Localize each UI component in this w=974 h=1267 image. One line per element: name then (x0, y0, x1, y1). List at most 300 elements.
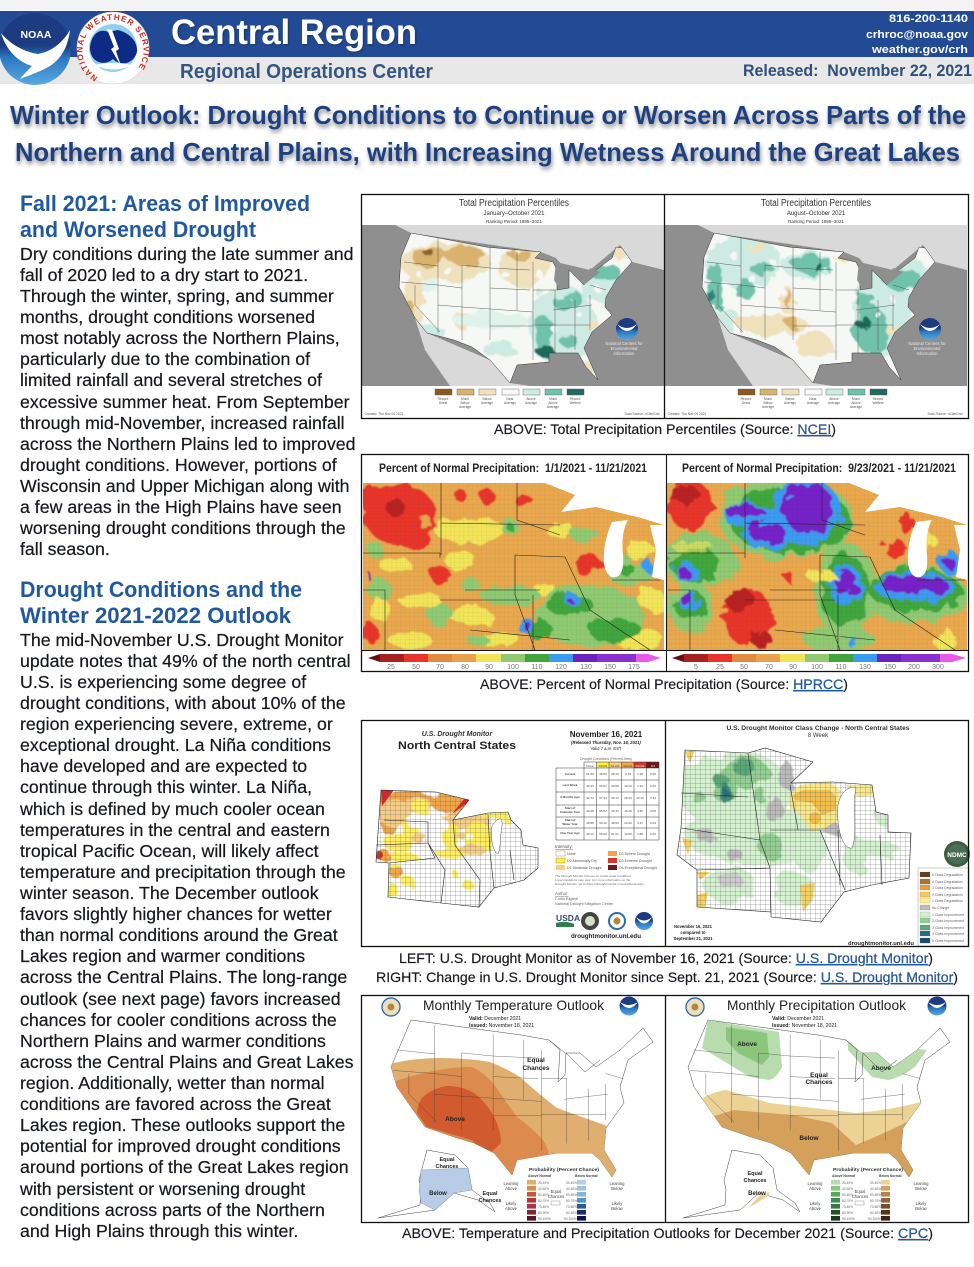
body text: Drought Conditions: and High Plains through this winter. (20, 1221, 298, 1241)
legend labels: Average (481, 401, 493, 405)
text: contact details: weather.gov/crh (871, 44, 968, 56)
legend: precipitation probability: Likely (810, 1201, 821, 1206)
legend: right color bar: 150 (884, 664, 896, 671)
table: drought conditions: 34.48 (586, 809, 594, 813)
body text: Fall 2021: Through the winter, spring, and summer (20, 286, 334, 306)
legend: temperature probability: Leaning (610, 1181, 625, 1186)
legend: precipitation probability: Leaning (808, 1181, 823, 1186)
caption: precipitation percentiles: ABOVE: Total Precipitation Percentiles (Source: NCEI) (494, 421, 836, 437)
label: map labels: Above (445, 1116, 465, 1123)
text: map date: Valid 7 a.m. EST (590, 746, 622, 751)
body text: Drought Conditions: outlook (see next page) favors increased (20, 989, 341, 1009)
table: drought conditions: 24.93 (624, 821, 632, 825)
table: drought conditions: 38.69 (611, 821, 619, 825)
legend: precipitation probability: Leaning (914, 1181, 929, 1186)
text: NCEI credit: Information (917, 351, 938, 356)
legend: left color bar: 120 (555, 664, 567, 671)
legend: temperature probability: 50-60% (566, 1193, 577, 1197)
legend: class change: 1 Class Improvement (932, 913, 964, 917)
text column: Drought Conditions (19, 577, 354, 1241)
icon: NOAA logo: NOAA (21, 29, 52, 41)
legend: precipitation probability (808, 1167, 929, 1221)
map: percent of normal, since September (664, 478, 967, 653)
icons: agency seals (686, 996, 946, 1016)
heading: Fall 2021: and Worsened Drought (20, 217, 257, 242)
text: map titles (379, 463, 957, 475)
text: NCEI credit (908, 341, 946, 356)
table: drought conditions: Last Week (563, 783, 578, 787)
label: map labels: Chances (744, 1178, 766, 1184)
table: drought conditions: D2-D4 (624, 764, 633, 768)
legend labels: Record (873, 397, 883, 401)
table: drought conditions: 1.38 (637, 772, 643, 776)
caption: drought monitor (376, 950, 958, 985)
label: map labels: Chances (436, 1164, 458, 1170)
heading: Drought Conditions and the Winter Outlook: Drought Conditions and the (20, 577, 302, 602)
text: map titles: Percent of Normal Precipitation: 9/23/2021 - 11/21/2021 (682, 463, 957, 475)
legend: precipitation probability: Chances (852, 1194, 868, 1199)
table: drought conditions (556, 762, 659, 840)
text: map title: Total Precipitation Percentiles (761, 198, 871, 209)
icon: NDMC logo (944, 841, 970, 867)
legend: right color bar: 110 (835, 664, 847, 671)
legend: right color bar: 5 (694, 664, 698, 671)
label: map labels: Equal (483, 1191, 498, 1197)
heading: Drought Conditions and the Winter Outlook: Winter 2021-2022 Outlook (20, 603, 292, 628)
legend: temperature probability: Likely (612, 1201, 623, 1206)
body text: Drought Conditions: conditions are favored across the Great (20, 1094, 331, 1114)
text: contact details: 816-200-1140 (889, 13, 968, 25)
text: notes and author: Drought Monitor, go to https://droughtmonitor.unl.edu/About.aspx (555, 882, 644, 886)
panel: percent of normal precipitation (358, 454, 968, 672)
body text: Fall 2021: Dry conditions during the late summer and (20, 244, 353, 264)
caption: percent of normal: ABOVE: Percent of Normal Precipitation (Source: HPRCC) (480, 676, 848, 692)
text: droughtmonitor url: droughtmonitor.unl.edu (848, 941, 915, 947)
legend labels: Much (764, 397, 772, 401)
table: drought conditions: D4 (651, 764, 655, 768)
text: map title: January–October 2021 (483, 211, 545, 217)
legend: right color bar: 100 (811, 664, 823, 671)
legend: right color bar: 90 (789, 664, 797, 671)
legend labels: Wettest (569, 401, 581, 405)
table: drought conditions: 65.52 (599, 809, 607, 813)
table: drought conditions: 39.88 (586, 821, 594, 825)
legend: precipitation probability: Below Normal (879, 1174, 902, 1178)
body text: Drought Conditions: drought conditions, with about 10% of the (20, 693, 346, 713)
text: dates: Issued: November 18, 2021 (469, 1023, 534, 1029)
text: class change title (726, 725, 910, 739)
text: map title (459, 198, 569, 224)
body text: Drought Conditions: temperatures in the central and eastern (20, 820, 330, 840)
table: drought conditions: 49.33 (586, 784, 594, 788)
table: drought conditions: D1-D4 (611, 764, 620, 768)
table: drought conditions: Start of (565, 806, 575, 810)
label: map labels: Above (737, 1041, 757, 1048)
text: title: Monthly Precipitation Outlook (727, 997, 907, 1013)
caption: outlooks: ABOVE: Temperature and Precipitation Outlooks for December 2021 (Source: CPC) (402, 1225, 933, 1241)
body text: Fall 2021: excessive summer heat. From September (20, 392, 350, 412)
legend: percentile colors (435, 389, 584, 395)
text: notes and author (555, 874, 644, 906)
table: drought conditions: None (586, 764, 594, 768)
table: drought conditions: Current (565, 772, 575, 776)
legend: temperature probability: 33-40% (538, 1181, 549, 1185)
body text: Drought Conditions: exceptional drought. La Niña conditions (20, 735, 331, 755)
text: notes and author: The Drought Monitor focuses on broad-scale conditions. (555, 874, 632, 878)
table: drought conditions: 0.00 (650, 832, 656, 836)
legend: precipitation probability: 80-90% (842, 1211, 853, 1215)
table: drought conditions: 0.00 (650, 809, 656, 813)
body text: Fall 2021: through mid-November, increased rainfall (20, 413, 345, 433)
legend: intensity: Intensity: (555, 844, 573, 849)
body text: Fall 2021: limited rainfall and several stretches of (20, 370, 322, 390)
panel: drought monitor (362, 720, 970, 947)
legend: intensity: D0 Abnormally Dry (567, 859, 597, 863)
table: drought conditions: 10.89 (624, 832, 632, 836)
table: drought conditions: 45.14 (611, 796, 619, 800)
text: map titles: Percent of Normal Precipitation: 1/1/2021 - 11/21/2021 (379, 463, 648, 475)
legend: precipitation probability: 70-80% (870, 1205, 881, 1209)
heading: Fall 2021 (20, 191, 310, 242)
label: map labels: Equal (810, 1072, 828, 1079)
text: dates: Valid: December 2021 (772, 1016, 824, 1022)
table: drought conditions: 0.00 (650, 784, 656, 788)
text: map title: Total Precipitation Percentiles (459, 198, 569, 209)
map: August-October percentiles (665, 198, 967, 416)
legend labels (365, 397, 660, 416)
legend labels: Below (764, 401, 773, 405)
map: Alaska (378, 1150, 495, 1218)
legend labels: Record (570, 397, 580, 401)
title (10, 100, 966, 167)
text: notes and author: Author: (555, 891, 569, 896)
table: drought conditions: 2.34 (650, 796, 656, 800)
body text: Drought Conditions: across the Central Plains and Great Lakes (20, 1052, 354, 1072)
table: drought conditions: One Year Ago (560, 831, 580, 835)
map: percent of normal, year to date (358, 483, 666, 650)
table: drought conditions: 48.92 (599, 772, 607, 776)
icon: National Weather Service logo: NATIONAL WEATHER SERVICE (76, 14, 150, 82)
legend: precipitation probability: 70-80% (842, 1205, 853, 1209)
icons: partner logos (556, 912, 653, 930)
legend labels: Average (504, 401, 516, 405)
table: drought conditions: 10.24 (624, 784, 632, 788)
legend: temperature probability: 90-100% (564, 1217, 577, 1221)
legend: right color bar: 25 (716, 664, 724, 671)
legend labels: Below (461, 401, 470, 405)
legend labels: Much (549, 397, 557, 401)
label: map labels: Equal (748, 1171, 763, 1177)
body text: Fall 2021: drought conditions. However, portions of (20, 455, 337, 475)
legend: class change: 3 Class Degradation (932, 886, 963, 890)
table: drought conditions: D0-D4 (599, 764, 608, 768)
text: comparison dates: compared to (680, 930, 706, 935)
text: map title (761, 198, 871, 224)
header banner (0, 11, 974, 85)
text: comparison dates: September 21, 2021 (673, 936, 713, 941)
legend: class change: 4 Class Improvement (932, 932, 964, 936)
legend labels: Driest (742, 401, 750, 405)
body text: Fall 2021: fall season. (20, 539, 110, 559)
legend: temperature probability: 33-40% (566, 1181, 577, 1185)
legend: temperature probability: Above (505, 1186, 518, 1191)
panel: monthly outlooks (362, 995, 968, 1222)
body text: Drought Conditions: conditions across parts of the Northern (20, 1200, 325, 1220)
legend: precipitation probability: 90-100% (868, 1217, 881, 1221)
legend labels: Record (438, 397, 448, 401)
legend: temperature probability: Above (505, 1206, 518, 1211)
map: U.S. Drought Monitor north central states (376, 790, 538, 908)
text: map title: Ranking Period: 1895–2021 (486, 219, 542, 224)
body text: Drought Conditions: which is defined by much cooler ocean (19, 799, 325, 819)
legend: precipitation probability: Above (809, 1206, 822, 1211)
legend: right color bar (672, 654, 966, 671)
legend: left color bar: 130 (580, 664, 592, 671)
map: monthly temperature outlook (378, 996, 653, 1221)
text: map title: U.S. Drought Monitor (422, 731, 493, 738)
legend: temperature probability: 40-50% (566, 1187, 577, 1191)
table: drought conditions: 29.68 (611, 784, 619, 788)
text: NCEI credit: National Centers for (605, 341, 643, 346)
legend: temperature probability (504, 1167, 625, 1221)
legend: precipitation probability: 33-40% (842, 1181, 853, 1185)
caption: drought monitor: RIGHT: Change in U.S. Drought Monitor since Sept. 21, 2021 (Source: U.S. Drought Monitor) (376, 969, 958, 985)
body text: Fall 2021: most notably across the Northern Plains, (20, 328, 340, 348)
icon: NOAA logo (0, 13, 71, 85)
text: map title (398, 731, 516, 752)
legend: left color bar: 50 (412, 664, 420, 671)
legend: class change: 5 Class Degradation (932, 873, 963, 877)
body text: Drought Conditions: with persistent or worsening drought (19, 1179, 305, 1199)
legend: temperature probability: Chances (548, 1194, 564, 1199)
legend: class change: 3 Class Improvement (932, 926, 964, 930)
body text: Drought Conditions: Northern Plains and warmer conditions (20, 1031, 326, 1051)
text: notes and author: National Drought Mitigation Center (555, 902, 614, 906)
table: drought conditions: 3 Months Ago (560, 795, 580, 799)
text: notes and author: Curtis Riganti (555, 897, 578, 901)
legend: class change: 2 Class Improvement (932, 919, 964, 923)
legend: temperature probability: 50-60% (538, 1193, 549, 1197)
body text: Drought Conditions: temperature and precipitation through the (20, 862, 346, 882)
heading: Central Region: Central Region (171, 13, 417, 52)
legend labels: Average (459, 405, 471, 409)
legend labels: Near (809, 397, 817, 401)
legend: right color bar: 130 (859, 664, 871, 671)
table: drought conditions: 1.19 (637, 784, 643, 788)
table: drought conditions: 21.01 (611, 832, 619, 836)
body text: Drought Conditions: region. Additionally, wetter than normal (20, 1073, 325, 1093)
legend: temperature probability: Likely (506, 1201, 517, 1206)
text: class change title: U.S. Drought Monitor Class Change - North Central States (726, 725, 910, 732)
legend: class change: 1 Class Degradation (932, 899, 963, 903)
body text: Drought Conditions: The mid-November U.S. Drought Monitor (20, 630, 344, 650)
legend: left color bar: 100 (507, 664, 519, 671)
legend labels: Average (807, 401, 819, 405)
legend: right color bar: 200 (908, 664, 920, 671)
legend: intensity: D2 Severe Drought (619, 852, 650, 856)
legend: right color bar: 50 (740, 664, 748, 671)
legend: intensity: D4 Exceptional Drought (619, 866, 657, 870)
legend: precipitation probability: 90-100% (842, 1217, 855, 1221)
legend labels: Above (829, 397, 839, 401)
table: drought conditions: 60.12 (599, 821, 607, 825)
legend: precipitation probability: 40-50% (870, 1187, 881, 1191)
legend: right color bar: 300 (932, 664, 944, 671)
text: contact details: crhroc@noaa.gov (866, 29, 969, 41)
legend: precipitation probability: 60-70% (842, 1199, 853, 1203)
text: class change title: 8 Week (808, 733, 829, 739)
map: monthly precipitation outlook (683, 996, 950, 1221)
title: Winter Outlook: Drought Conditions to Continue or Worsen Across Parts of the (10, 100, 966, 130)
caption: drought monitor: LEFT: U.S. Drought Monitor as of November 16, 2021 (Source: U.S. Drought Monitor) (399, 950, 933, 966)
legend: temperature probability: Leaning (504, 1181, 519, 1186)
legend: precipitation probability: 40-50% (842, 1187, 853, 1191)
heading: Regional Operations Center: Regional Operations Center (180, 61, 433, 83)
icons: partner logos: USDA (556, 913, 580, 923)
text: map date: November 16, 2021 (570, 730, 643, 739)
body text: Fall 2021: across the Northern Plains led to improved (20, 434, 355, 454)
body text: Drought Conditions: than normal conditions around the Great (20, 925, 338, 945)
legend: temperature probability: Below (611, 1206, 624, 1211)
text: map title: August–October 2021 (787, 211, 846, 217)
legend: temperature probability: 90-100% (538, 1217, 551, 1221)
table: drought conditions: 57.33 (599, 796, 607, 800)
table: drought conditions: 42.73 (586, 796, 594, 800)
text: map date: Drought Conditions (Percent Area) (580, 757, 632, 761)
label: map labels: Below (799, 1135, 820, 1142)
text: comparison dates: November 16, 2021 (674, 924, 713, 929)
table: drought conditions: 50.90 (599, 832, 607, 836)
table: drought conditions: 0.04 (650, 821, 656, 825)
legend labels: Above (526, 397, 536, 401)
body text: Fall 2021 (19, 244, 355, 559)
body text: Fall 2021: months, drought conditions worsened (20, 307, 315, 327)
legend: left color bar: 90 (485, 664, 493, 671)
legend: intensity: D1 Moderate Drought (567, 866, 602, 870)
legend: class change (918, 868, 969, 946)
label: map labels (429, 1057, 550, 1204)
text: NCEI credit: Information (614, 351, 635, 356)
body text: Drought Conditions: update notes that 49% of the north central (20, 651, 351, 671)
table: drought conditions: 28.10 (611, 772, 619, 776)
legend: precipitation probability: Probability (Percent Chance) (833, 1167, 903, 1173)
label: map labels: Chances (805, 1079, 833, 1086)
legend: intensity (555, 844, 657, 870)
legend: temperature probability: 70-80% (538, 1205, 549, 1209)
text: contact details (866, 13, 969, 56)
text: dates (469, 1016, 534, 1029)
text: NCEI credit (605, 341, 643, 356)
legend labels: Average (547, 405, 559, 409)
body text: Drought Conditions: chances for cooler conditions across the (20, 1010, 337, 1030)
label: map labels: Chances (479, 1198, 501, 1204)
label: map labels (737, 1041, 891, 1197)
text: notes and author: Local conditions may vary. For more information on the (555, 878, 631, 882)
text: NCEI credit: National Centers for (908, 341, 946, 346)
legend labels: Below (483, 397, 492, 401)
label: map labels: Below (748, 1191, 766, 1197)
legend: left color bar: 175 (628, 664, 640, 671)
legend: precipitation probability: 33-40% (870, 1181, 881, 1185)
body text: Drought Conditions: U.S. is experiencing some degree of (20, 672, 306, 692)
legend labels (668, 397, 963, 416)
body text: Drought Conditions: potential for improved drought conditions (20, 1136, 341, 1156)
text: title: Monthly Temperature Outlook (423, 997, 605, 1013)
legend: right color bar: 70 (765, 664, 773, 671)
legend: temperature probability: 80-90% (538, 1211, 549, 1215)
table: drought conditions: 10.15 (636, 796, 644, 800)
table: drought conditions: Calendar Year (560, 810, 581, 814)
legend: precipitation probability: Above Normal (832, 1174, 855, 1178)
legend labels: Average (762, 405, 774, 409)
icons: agency seals (382, 996, 638, 1016)
table: drought conditions: 51.06 (586, 772, 594, 776)
legend: precipitation probability: Likely (916, 1201, 927, 1206)
legend labels: Created: Thu Nov 04 2021 (365, 412, 404, 416)
legend: left color bar: 80 (461, 664, 469, 671)
body text: Fall 2021: particularly due to the combination of (20, 349, 310, 369)
legend: temperature probability: 60-70% (538, 1199, 549, 1203)
legend labels: Much (461, 397, 469, 401)
body text: Drought Conditions: continue through this winter. La Niña, (20, 777, 312, 797)
table: drought conditions: 20.23 (624, 796, 632, 800)
legend: precipitation probability: Below (915, 1206, 928, 1211)
body text: Drought Conditions: Lakes region and warmer conditions (20, 946, 305, 966)
text: NCEI credit: Environmental (914, 346, 940, 351)
map: drought class change (672, 745, 917, 930)
table: drought conditions: 9.79 (625, 772, 631, 776)
body text: Drought Conditions: Lakes region. These outlooks support the (20, 1115, 345, 1135)
legend labels: Much (852, 397, 860, 401)
legend labels: Driest (439, 401, 447, 405)
label: map labels: Chances (522, 1065, 550, 1072)
body text: Drought Conditions: have developed and are expected to (20, 756, 307, 776)
body text: Fall 2021: worsening drought conditions through the (19, 518, 346, 538)
text column: Fall 2021 (19, 191, 355, 559)
body text: Drought Conditions: tropical Pacific Ocean, will likely affect (20, 841, 319, 861)
legend labels: Wettest (872, 401, 884, 405)
legend labels: Above (548, 401, 558, 405)
legend labels: Average (828, 401, 840, 405)
map: Alaska (683, 1150, 800, 1218)
title: Northern and Central Plains, with Increasing Wetness Around the Great Lakes (15, 137, 960, 167)
legend: precipitation probability: Below (915, 1186, 928, 1191)
text: dates: Issued: November 18, 2021 (772, 1023, 837, 1029)
table: drought conditions: 0.00 (650, 772, 656, 776)
legend: precipitation probability: 60-70% (870, 1199, 881, 1203)
legend: left color bar (368, 654, 661, 671)
top strip (0, 0, 974, 10)
legend: left color bar: 25 (387, 664, 395, 671)
body text: Fall 2021: fall of 2020 led to a dry start to 2021. (20, 265, 308, 285)
body text: Drought Conditions: across the Central Plains. The long-range (20, 967, 347, 987)
legend: precipitation probability: 50-60% (870, 1193, 881, 1197)
legend labels: Average (525, 401, 537, 405)
legend: temperature probability: 60-70% (566, 1199, 577, 1203)
table: drought conditions: 3.27 (637, 821, 643, 825)
legend: class change: 5 Class Improvement (932, 939, 964, 943)
table: drought conditions: Start of (565, 818, 575, 822)
legend: temperature probability: 40-50% (538, 1187, 549, 1191)
legend: temperature probability: Below Normal (575, 1174, 598, 1178)
body text: Drought Conditions: region experiencing severe, extreme, or (20, 714, 333, 734)
legend labels: Created: Thu Nov 04 2021 (668, 412, 707, 416)
legend: class change: 4 Class Degradation (932, 880, 963, 884)
heading: Drought Conditions and the Winter Outlook (20, 577, 302, 628)
table: drought conditions: Water Year (562, 822, 579, 826)
text: map title: Ranking Period: 1895–2021 (788, 219, 844, 224)
legend: precipitation probability: 50-60% (842, 1193, 853, 1197)
